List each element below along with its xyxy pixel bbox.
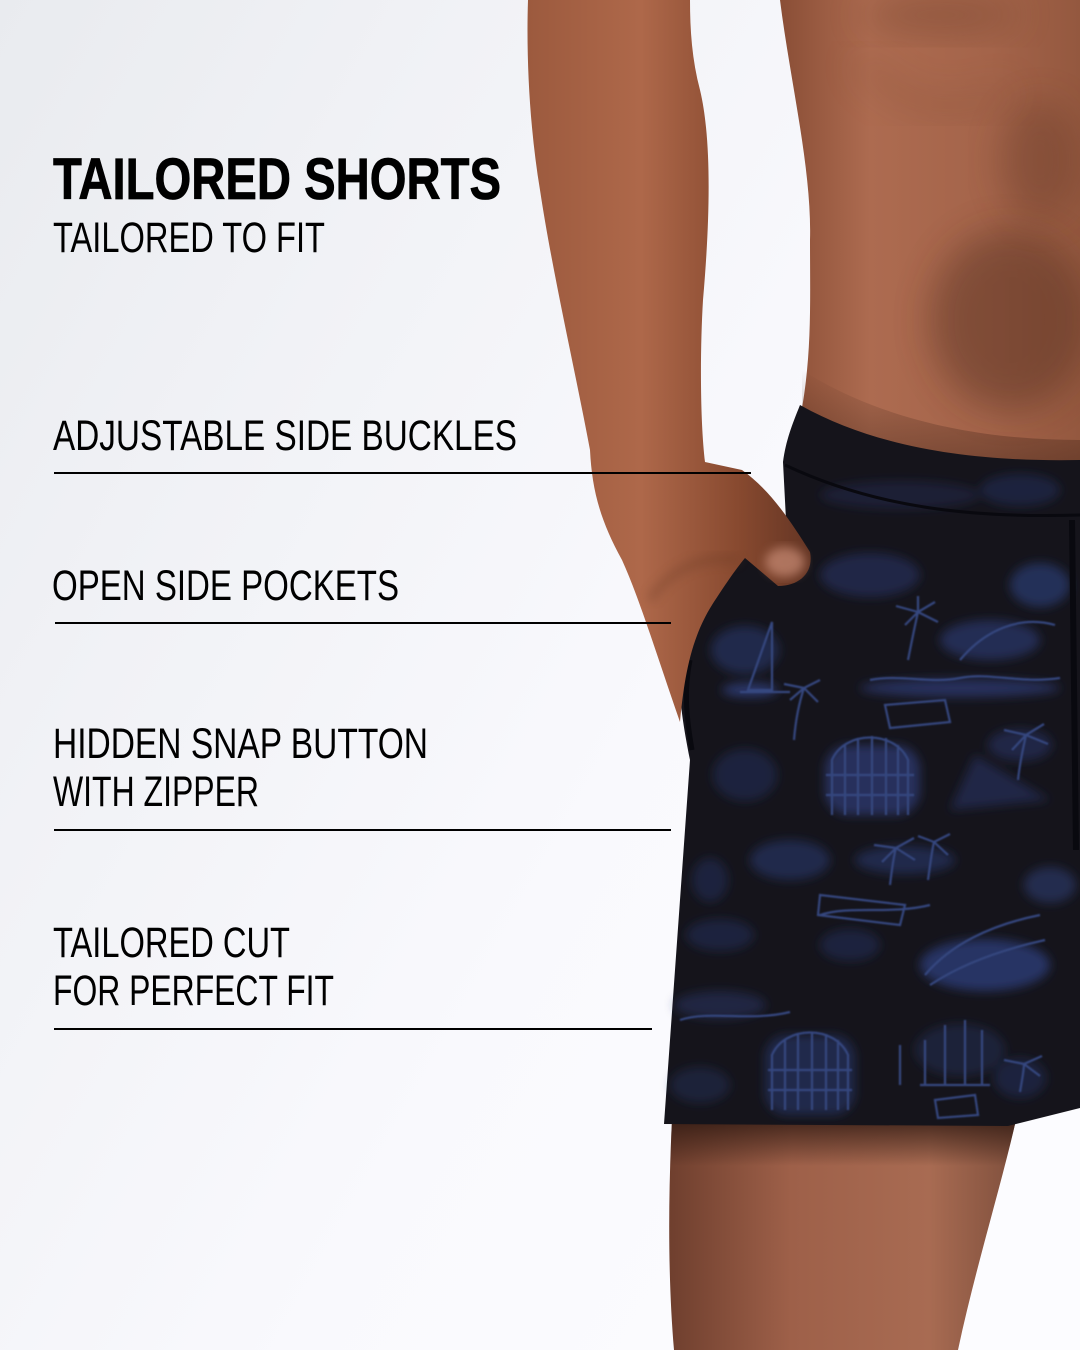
leg shadow xyxy=(669,1120,1016,1350)
feature: tailored cut for perfect fit: TAILORED CUT xyxy=(53,919,290,967)
shorts waistband and seam xyxy=(686,465,1080,850)
feature: hidden snap button with zipper xyxy=(53,720,671,831)
feature: tailored cut for perfect fit xyxy=(53,919,652,1030)
knuckle shading xyxy=(650,559,740,600)
figures xyxy=(900,1020,990,1085)
hotel details xyxy=(826,736,914,815)
heading: TAILORED SHORTS xyxy=(53,147,501,212)
model photo xyxy=(528,0,1080,1350)
subheading: TAILORED TO FIT xyxy=(53,214,325,262)
fingertip xyxy=(765,547,805,577)
title xyxy=(53,147,501,262)
torso xyxy=(780,0,1080,480)
feature: tailored cut for perfect fit: FOR PERFECT FIT xyxy=(53,967,334,1015)
shorts print: soft tones xyxy=(670,474,1076,1115)
comic words xyxy=(885,700,950,728)
feature: hidden snap button with zipper: HIDDEN SNAP BUTTON xyxy=(53,720,428,768)
shorts print: line art xyxy=(680,596,1060,1118)
arm and hand xyxy=(528,0,811,722)
leg xyxy=(669,1120,1016,1350)
feature: hidden snap button with zipper: WITH ZIPPER xyxy=(53,768,259,816)
palm trees xyxy=(896,596,938,660)
sailboat xyxy=(740,622,790,692)
feature: adjustable side buckles: ADJUSTABLE SIDE BUCKLES xyxy=(53,412,517,460)
shorts xyxy=(664,405,1080,1126)
feature: open side pockets: OPEN SIDE POCKETS xyxy=(52,562,399,610)
waves xyxy=(870,676,1060,680)
